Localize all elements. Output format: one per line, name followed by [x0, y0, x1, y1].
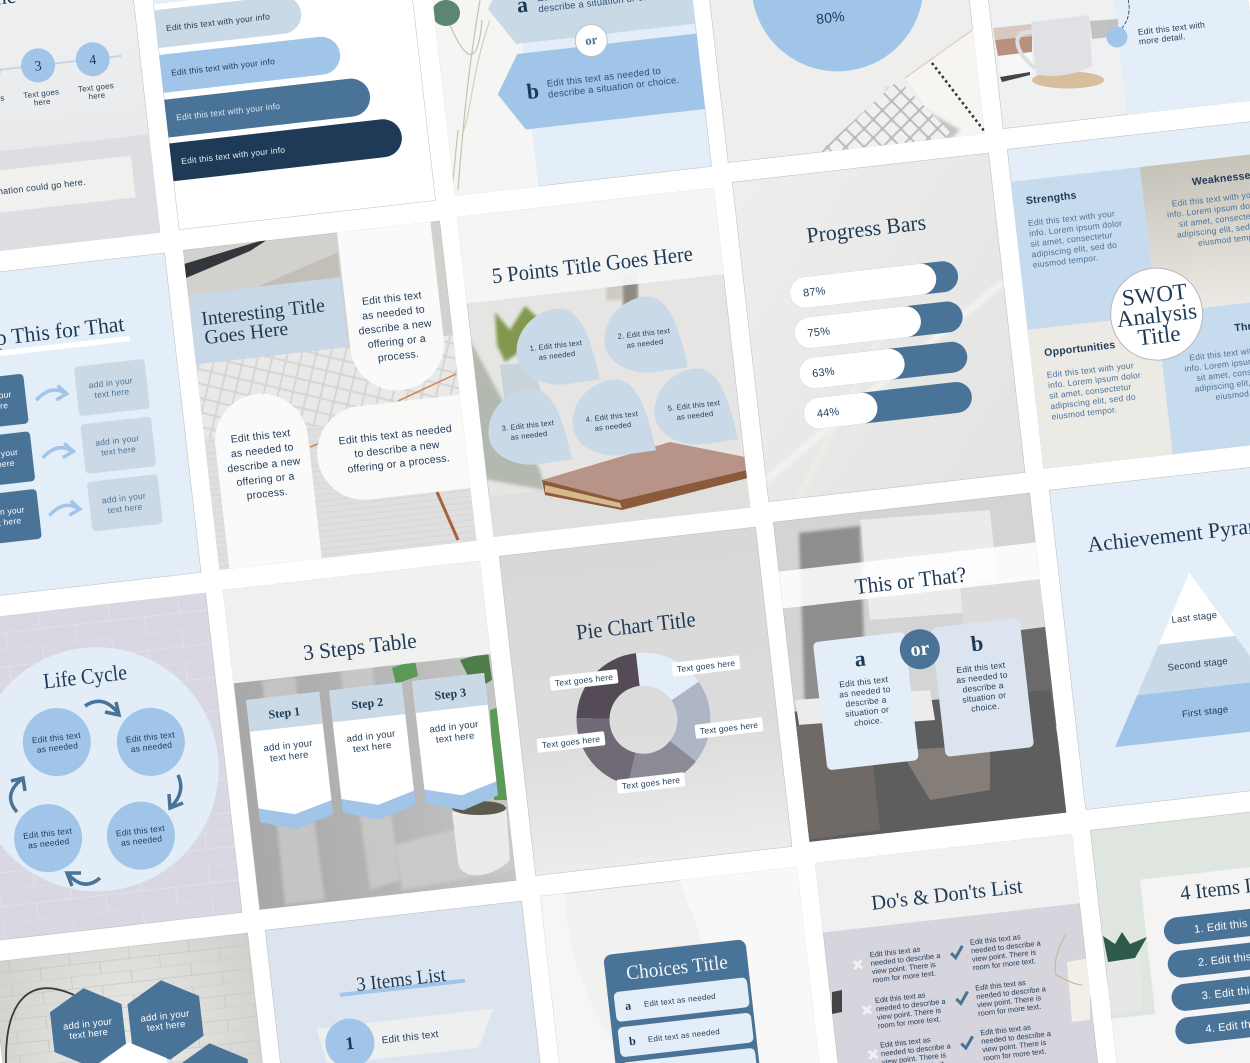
- cycle arrows: [11, 701, 183, 886]
- row 2: text here: [101, 444, 136, 458]
- do items: view point. There is: [982, 1038, 1047, 1054]
- step 1: [246, 692, 334, 833]
- underline: [0, 336, 130, 356]
- callout: top right: Edit this text: [361, 289, 422, 308]
- choices box: b: [628, 1034, 637, 1048]
- title band: [457, 188, 724, 303]
- hexagon 2: [125, 976, 206, 1063]
- mug photo: [993, 15, 1118, 89]
- circle with 80%: 80%: [815, 8, 846, 27]
- quadrant: opportunities: sit amet, consectetur: [1049, 381, 1132, 401]
- centre title circle: Analysis: [1115, 298, 1198, 332]
- step 2: [329, 682, 417, 824]
- don't items: Edit this text as: [869, 945, 921, 959]
- choices box: Edit text as needed: [647, 1027, 720, 1044]
- item 1: [1163, 904, 1250, 946]
- step 1: text here: [269, 749, 309, 765]
- quadrant: strengths: info. Lorem ipsum dolor: [1029, 218, 1123, 238]
- panel: 5 points: [457, 188, 750, 537]
- title band: [188, 277, 348, 364]
- hexagon 1: [48, 984, 128, 1063]
- point 5: 5. Edit this text: [667, 398, 720, 413]
- plant photo: [1103, 932, 1147, 1015]
- item 2: [1166, 937, 1250, 979]
- desk photo: [184, 240, 476, 570]
- hexagon centre white: [93, 1038, 173, 1063]
- item 1: Edit this text: [381, 1029, 439, 1046]
- point 2: [604, 296, 688, 372]
- pyramid chart: First stage: [1181, 704, 1229, 720]
- callout: top right: offering or a: [367, 333, 426, 351]
- heading: 3 Steps Table: [302, 628, 418, 665]
- desk props: [832, 935, 1090, 1022]
- do items: needed to describe a: [976, 984, 1047, 1001]
- row 1: [0, 359, 150, 431]
- point 1: [516, 308, 600, 384]
- step 4: as needed: [27, 836, 70, 850]
- don't items: needed to describe a: [881, 1041, 952, 1058]
- quadrant: strengths: Edit this text with your: [1027, 208, 1116, 228]
- callout: right pill: Edit this text as needed: [338, 423, 453, 448]
- bar 3: Edit this text with your info: [176, 101, 281, 122]
- option a: Edit this text: [839, 674, 889, 690]
- timeline step markers: here: [88, 91, 106, 101]
- quadrant: opportunities: Opportunities: [1044, 339, 1116, 359]
- bar 63%: [797, 340, 969, 390]
- step 4: [10, 801, 86, 876]
- row 3: [0, 474, 163, 547]
- heading: 3 Items List: [355, 964, 447, 996]
- panel: pie chart: [499, 527, 792, 876]
- callout: bottom left: as needed to: [230, 441, 294, 460]
- arrow b: b: [525, 78, 540, 104]
- callout: bottom left: Edit this text: [230, 427, 291, 446]
- heading: Pie Chart Title: [575, 606, 697, 645]
- title band: Interesting Title: [200, 294, 326, 330]
- centre title circle: Title: [1136, 321, 1182, 350]
- panel: map this for that: [0, 253, 201, 602]
- arrow b: [493, 34, 705, 132]
- bar 44%: 44%: [816, 406, 840, 420]
- don't items: view point. There is: [876, 1006, 942, 1022]
- callout: right pill: [312, 395, 470, 505]
- pyramid chart: Second stage: [1167, 656, 1228, 674]
- timeline step markers: [0, 42, 114, 106]
- pie labels: Text goes here: [541, 734, 601, 750]
- or badge: or: [909, 637, 931, 661]
- step 3: [103, 798, 179, 873]
- callout: bottom left: describe a new: [227, 455, 301, 475]
- row 2: add in your: [95, 433, 140, 448]
- heading: This or That?: [853, 562, 968, 599]
- panel: SWOT: [1007, 120, 1250, 469]
- panel: timeline: [0, 0, 160, 262]
- don't items: Edit this text as: [874, 990, 926, 1005]
- step 2: [113, 704, 189, 780]
- choices box: Edit text as needed: [643, 992, 716, 1009]
- row 1: text here: [94, 386, 130, 400]
- quadrant: opportunities: eiusmod tempor.: [1051, 404, 1118, 422]
- point 4: 4. Edit this text: [585, 409, 638, 424]
- panel: interesting title: [183, 220, 476, 570]
- option b: choice.: [971, 701, 1000, 714]
- row 1: add in your: [88, 375, 133, 390]
- bar 63%: 63%: [812, 366, 835, 380]
- arrow b: Edit this text as needed to: [546, 66, 662, 90]
- step 4: Edit this text: [23, 825, 73, 841]
- list box: [1140, 855, 1250, 1063]
- quadrant: strengths: eiusmod tempor.: [1032, 252, 1099, 270]
- step 2: text here: [352, 740, 392, 755]
- callout: bottom left: offering or a: [236, 470, 295, 489]
- do items: room for more text.: [972, 956, 1036, 972]
- timeline step markers: 4: [89, 53, 97, 69]
- or badge: [574, 24, 608, 57]
- point 3: as needed: [510, 429, 548, 442]
- pyramid chart: [1096, 562, 1250, 747]
- pie labels: Text goes here: [554, 672, 614, 688]
- centre title circle: [1106, 263, 1208, 365]
- curtains and plant photo: [262, 652, 515, 905]
- quadrant: strengths: sit amet, consectetur: [1030, 230, 1113, 249]
- circle with 80%: [752, 0, 922, 72]
- panel: life cycle: [0, 593, 242, 942]
- keyboard and notebook photo: [819, 28, 985, 152]
- quadrant: strengths: adipiscing elit, sed do: [1031, 240, 1118, 259]
- don't items: needed to describe a: [875, 997, 947, 1014]
- callout: top right: process.: [377, 348, 420, 365]
- do items: [950, 930, 1054, 1063]
- title band: Goes Here: [203, 318, 289, 349]
- panel: 3 steps table: [223, 558, 543, 934]
- point 5: [650, 365, 738, 449]
- don't items: room for more text.: [872, 969, 936, 985]
- don't items: needed to describe a: [870, 951, 942, 968]
- bar 87%: 87%: [802, 285, 826, 300]
- item 3: [1170, 970, 1250, 1012]
- panel: pie percent with keyboard photo: [709, 0, 985, 163]
- centre title circle: SWOT: [1121, 279, 1188, 311]
- lamp arc: [6, 988, 74, 1063]
- hexagon 3: [174, 1039, 254, 1063]
- pie labels: Text goes here: [676, 658, 736, 674]
- pie labels: Text goes here: [699, 720, 759, 736]
- title band: [779, 542, 1040, 608]
- quadrant: threats: [1157, 299, 1250, 454]
- timeline step markers: here: [33, 97, 51, 108]
- hexagon 1: add in your: [63, 1016, 113, 1033]
- quadrant: strengths: Strengths: [1025, 189, 1077, 207]
- hexagon 2: text here: [146, 1019, 186, 1034]
- point 2: as needed: [626, 337, 664, 350]
- text: detail: more detail.: [1138, 31, 1186, 46]
- or badge: or: [584, 32, 598, 48]
- bar 2: [159, 35, 342, 93]
- bar 4: [169, 117, 404, 181]
- quadrant: opportunities: Edit this text with your: [1046, 360, 1134, 380]
- option b: as needed to: [956, 669, 1008, 685]
- row 3: text here: [107, 501, 143, 515]
- do items: Edit this text as: [975, 978, 1026, 993]
- callout: right pill: to describe a new: [354, 439, 440, 460]
- points: [484, 293, 738, 469]
- callout: top right: [337, 222, 449, 395]
- don't items: [852, 942, 954, 1063]
- timeline step markers: Text goes: [78, 81, 114, 94]
- item 1: [316, 1002, 498, 1063]
- step 2: Edit this text: [125, 729, 175, 745]
- step 3: add in your: [429, 719, 479, 735]
- panel: do's and don'ts: [814, 833, 1115, 1063]
- point 2: 2. Edit this text: [617, 326, 670, 341]
- panel: progress bars: [732, 153, 1025, 502]
- point 5: as needed: [676, 409, 714, 422]
- do items: needed to describe a: [981, 1029, 1052, 1046]
- panel: hexagons: [0, 933, 286, 1063]
- quadrant: opportunities: adipiscing elit, sed do: [1050, 392, 1136, 411]
- bar 75%: [793, 300, 964, 350]
- heading: 5 Points Title Goes Here: [490, 241, 694, 288]
- option a: describe a: [845, 694, 887, 709]
- step 1: Edit this text: [31, 730, 81, 745]
- arrow b: describe a situation or choice.: [548, 75, 680, 101]
- bar 87%: [788, 260, 960, 310]
- arrow a: [484, 0, 695, 47]
- step 3: Edit this text: [115, 823, 165, 838]
- step 3: as needed: [120, 833, 163, 848]
- do items: view point. There is: [977, 993, 1042, 1010]
- do items: view point. There is: [971, 948, 1037, 964]
- step 3: text here: [435, 731, 475, 746]
- callout: bottom left: [210, 389, 322, 569]
- item 4: [1174, 1004, 1250, 1046]
- don't items: Edit this text as: [880, 1035, 931, 1050]
- do items: needed to describe a: [970, 938, 1042, 955]
- option b: b: [970, 630, 985, 656]
- bar 2: Edit this text with your info: [171, 56, 276, 78]
- hexagon 2: add in your: [140, 1008, 190, 1025]
- text: detail: Edit this text with: [1137, 19, 1206, 37]
- step 1: add in your: [263, 738, 313, 754]
- step 2: add in your: [346, 728, 396, 745]
- dot and dashed arc: [1106, 0, 1129, 48]
- item 1: 1: [344, 1033, 355, 1054]
- point 1: as needed: [538, 349, 576, 362]
- point 3: [484, 385, 572, 469]
- donut chart: [569, 646, 718, 794]
- bar 3: [164, 77, 372, 138]
- heading: Life Cycle: [42, 659, 128, 694]
- do items: Edit this text as: [969, 932, 1021, 947]
- choices box: [603, 939, 777, 1063]
- step 2: as needed: [130, 740, 173, 754]
- point 1: 1. Edit this text: [529, 338, 582, 353]
- panel: choices: [540, 867, 836, 1063]
- bar 1: Edit this text with your info: [165, 11, 271, 33]
- step 1: as needed: [36, 740, 79, 755]
- bar 1: [154, 0, 303, 48]
- heading: Progress Bars: [805, 209, 927, 248]
- callout: bottom left: process.: [246, 486, 288, 502]
- option b: situation or: [962, 690, 1007, 705]
- panel: this or that: [752, 479, 1108, 876]
- underline: [340, 979, 465, 997]
- option b: Edit this text: [956, 660, 1006, 675]
- desk photo: [462, 240, 770, 540]
- option b: [931, 618, 1034, 757]
- step 3: Step 3: [434, 685, 467, 703]
- row 2: [0, 416, 157, 489]
- pie labels: [536, 655, 764, 794]
- panel: 3 items list: [265, 901, 558, 1063]
- point 4: as needed: [594, 420, 632, 433]
- step 2: Step 2: [351, 695, 384, 712]
- bar 4: Edit this text with your info: [181, 144, 286, 166]
- heading: Do's & Don'ts List: [870, 874, 1024, 915]
- quadrant: opportunities: [1028, 315, 1173, 469]
- pie labels: Text goes here: [621, 775, 681, 791]
- do items: room for more text.: [978, 1002, 1042, 1018]
- option a: [813, 632, 919, 770]
- row 3: add in your: [101, 490, 146, 505]
- callout: top right: as needed to: [361, 304, 426, 323]
- quadrant: opportunities: info. Lorem ipsum dolor: [1047, 370, 1141, 390]
- bar 75%: 75%: [807, 325, 831, 340]
- panel: 4 items list: [1082, 801, 1250, 1063]
- option a: situation or: [845, 704, 889, 719]
- bar 44%: [802, 380, 973, 430]
- do items: room for more text.: [983, 1047, 1047, 1063]
- panel: a or b choice: [432, 0, 712, 196]
- option a: as needed to: [839, 684, 891, 700]
- quadrant: strengths: [1011, 167, 1157, 330]
- pyramid chart: Last stage: [1171, 610, 1218, 626]
- hexagon 1: text here: [69, 1027, 109, 1042]
- option a: a: [853, 645, 867, 672]
- callout: top right: describe a new: [358, 317, 432, 338]
- timeline step markers: Text goes: [23, 87, 60, 100]
- step 3: [412, 673, 499, 814]
- option b: describe a: [962, 680, 1004, 695]
- timeline step markers: 3: [34, 59, 43, 75]
- panel: achievement pyramid: [1049, 461, 1250, 810]
- step 1: [19, 704, 94, 780]
- choices box: Choices Title: [625, 951, 729, 985]
- point 3: 3. Edit this text: [501, 418, 554, 433]
- dining room photo: [790, 510, 1070, 845]
- vase photo detail: [432, 0, 490, 190]
- callout: right pill: offering or a process.: [347, 452, 450, 476]
- quadrant: weaknesses: [1140, 152, 1250, 313]
- title band: [223, 561, 490, 683]
- option a: choice.: [854, 715, 883, 728]
- do items: Edit this text as: [980, 1023, 1031, 1037]
- don't items: room for more text.: [877, 1014, 941, 1030]
- don't items: view point. There is: [871, 960, 936, 976]
- panel: mug and detail: [961, 0, 1250, 130]
- choices box: a: [624, 998, 632, 1013]
- panel: stacked bars list: [142, 0, 436, 230]
- point 4: [568, 376, 656, 460]
- or badge: [898, 627, 942, 671]
- step 1: Step 1: [268, 704, 301, 722]
